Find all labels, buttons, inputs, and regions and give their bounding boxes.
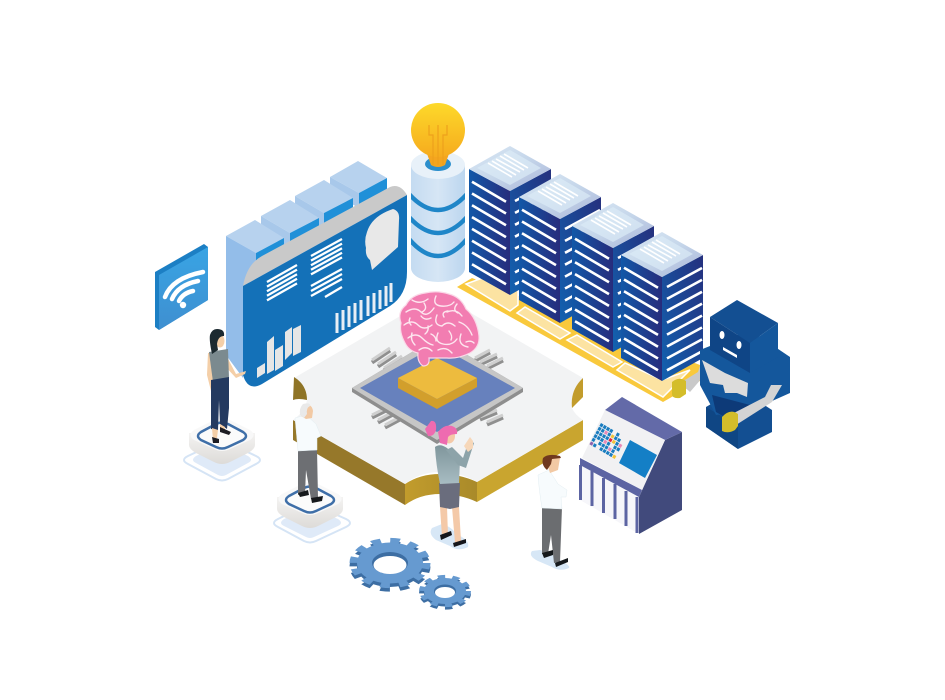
data panel with folder tabs	[226, 161, 407, 387]
robot chest plate	[702, 360, 748, 397]
head	[443, 428, 455, 444]
shadow ring	[274, 503, 350, 542]
server rack 1	[469, 146, 551, 295]
skirt	[439, 483, 460, 509]
blue ring	[286, 486, 334, 512]
platform gold sides	[293, 420, 405, 505]
robot torso	[700, 330, 790, 415]
machine top	[605, 397, 682, 440]
processor chip	[352, 337, 523, 444]
server rack 3	[572, 203, 654, 352]
head silhouette	[365, 209, 399, 270]
folder tab 4	[330, 161, 387, 208]
face	[216, 334, 224, 348]
hand	[464, 437, 473, 452]
server rack 4	[621, 232, 703, 381]
brain	[400, 292, 479, 366]
grey panel top edge	[243, 186, 407, 286]
shoes	[542, 550, 568, 567]
platform top	[293, 294, 583, 484]
machine side	[639, 432, 682, 534]
control machine	[580, 397, 682, 534]
machine lower front	[580, 465, 639, 534]
blue ring	[198, 422, 246, 448]
server rack 2	[519, 174, 601, 323]
robot face	[720, 331, 742, 358]
robot head	[710, 300, 778, 343]
yellow server floor	[457, 265, 705, 402]
gold die	[398, 378, 477, 409]
platform notches	[293, 377, 307, 400]
head	[545, 458, 560, 473]
hair	[210, 329, 224, 354]
shirt	[295, 415, 321, 451]
database cylinder	[409, 151, 467, 282]
pedestal block	[189, 433, 255, 464]
trousers	[211, 377, 229, 430]
legs and shoes	[212, 424, 225, 440]
machine legs	[580, 465, 637, 533]
arms	[207, 352, 246, 391]
folder tab 3	[295, 180, 353, 228]
chip pins	[372, 348, 503, 428]
robot left arm	[672, 366, 702, 398]
shadow under man with brown hair	[531, 550, 569, 570]
shirt	[538, 470, 567, 509]
folder tab 1	[226, 220, 284, 378]
blue panel face	[243, 195, 407, 387]
shadow ring	[184, 440, 260, 480]
shadow under woman with pink hair	[431, 524, 468, 549]
torso	[435, 445, 460, 484]
shoes	[298, 490, 323, 503]
head	[301, 405, 313, 419]
legs	[440, 507, 461, 543]
keypad	[589, 423, 626, 459]
folder tab 2	[261, 200, 319, 248]
machine purple strip	[580, 458, 642, 497]
large gear	[354, 541, 426, 589]
isometric artificial intelligence illustration	[155, 103, 790, 610]
barcode lines	[337, 283, 391, 333]
small gear	[422, 577, 468, 608]
pedestal left	[184, 418, 260, 480]
text lines	[267, 239, 342, 300]
wifi tile icon	[155, 244, 208, 330]
bulb	[411, 103, 465, 167]
bar chart	[257, 325, 301, 378]
pedestal block	[277, 497, 343, 528]
central platform	[293, 294, 583, 505]
trousers	[542, 507, 562, 563]
hair	[542, 455, 561, 470]
machine white panel	[582, 410, 665, 490]
trousers	[298, 449, 318, 499]
man with white hair	[295, 403, 323, 503]
woman with pink hair	[425, 421, 474, 547]
man with brown hair	[538, 455, 568, 567]
robot right arm	[730, 385, 782, 425]
robot lower body	[706, 388, 772, 449]
arm	[446, 440, 474, 468]
pedestal right	[274, 482, 350, 542]
chip base	[352, 337, 523, 444]
torso	[209, 349, 229, 382]
woman with black hair	[207, 329, 246, 443]
light bulb on cylinder	[409, 103, 467, 282]
robot	[672, 300, 790, 449]
shoes	[440, 531, 466, 547]
pink hair	[425, 421, 457, 445]
machine screen	[619, 440, 657, 478]
